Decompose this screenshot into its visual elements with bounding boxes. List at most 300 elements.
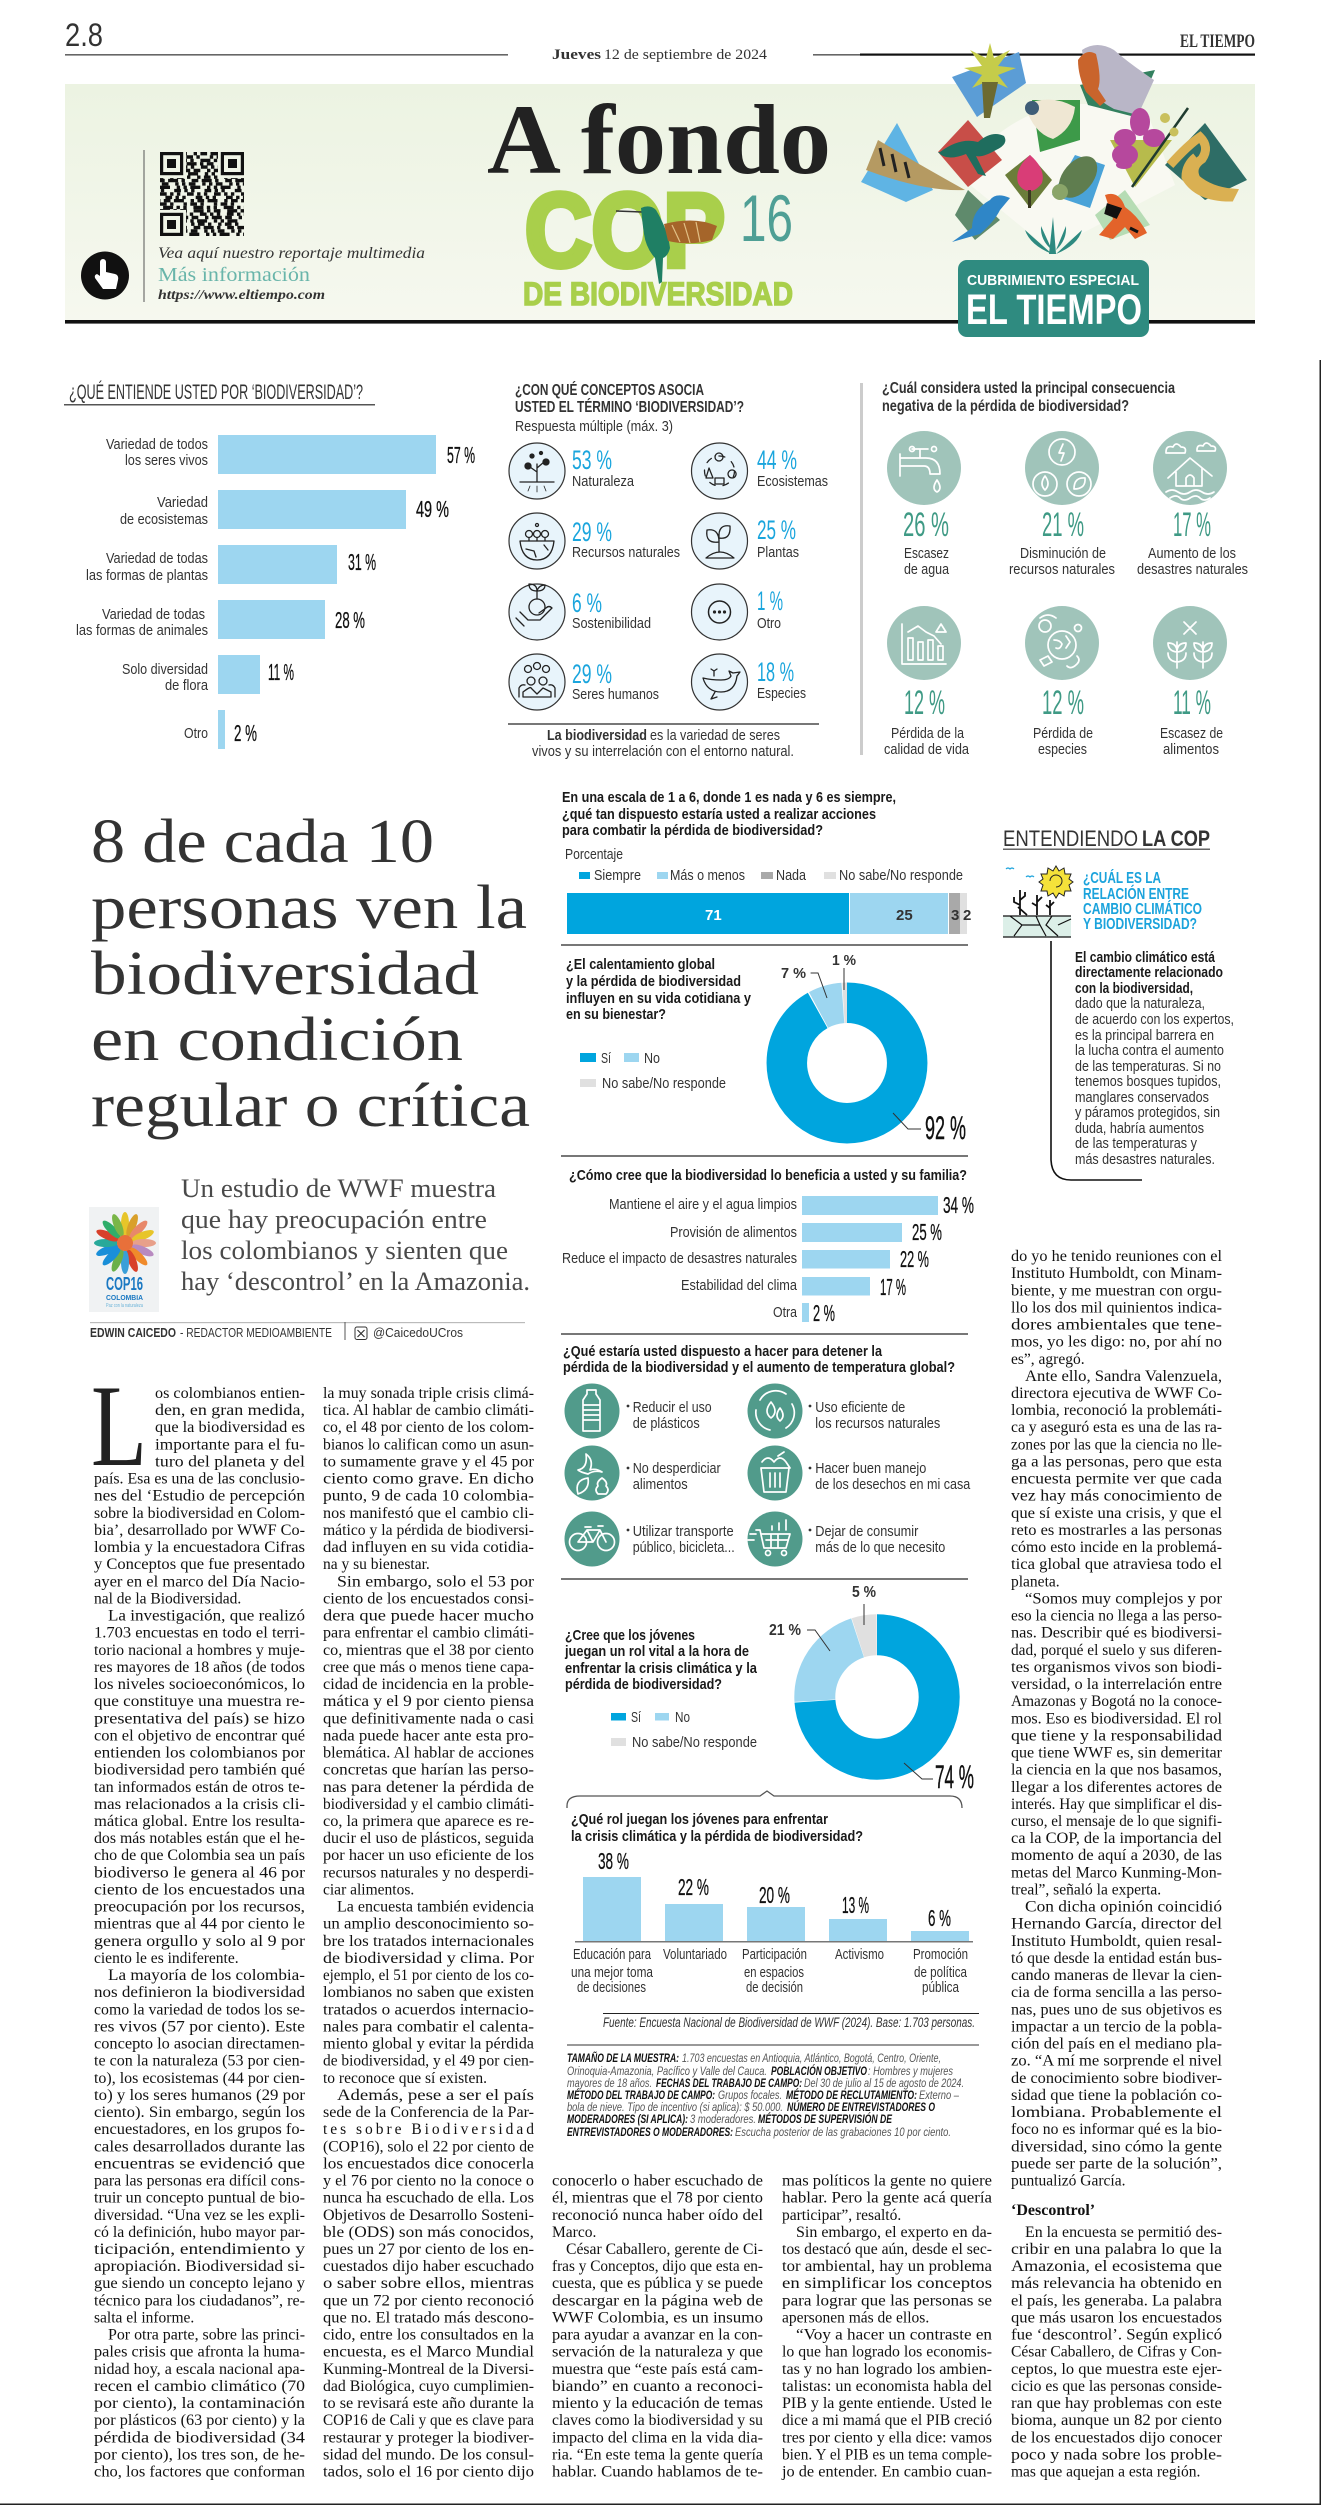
bar chart: Provisión de alimentos [670,1224,797,1241]
donut chart [765,952,966,1146]
column chart: una mejor toma [571,1964,654,1981]
text block: article column 1: nidad hoy, a escala nacional apa- [94,2361,305,2378]
text block: article column 2: encuesta, es el Marco Mundial [323,2344,534,2361]
percentages and labels [884,506,1248,758]
text block: article column 2: tratados o acuerdos internacio- [323,2001,534,2018]
text block: article column 2: tados, solo el 16 por ciento dijo [323,2464,534,2481]
text block: article column 1: den, en gran medida, [155,1402,305,1419]
text block: article column 2: para enfrentar el cambio climáti- [323,1625,534,1642]
text block: article column 2: tica. Al hablar de cambio climáti- [323,1402,534,1419]
text block: article column 1 [91,1362,306,2481]
text block: article column 1: cales desarrollados durante las [94,2138,305,2155]
legend [611,1709,757,1751]
byline: - REDACTOR MEDIOAMBIENTE [180,1325,332,1340]
text block: article column 2: los encuestados dice conocerla [323,2155,534,2172]
text block: article column 3: reconoció nunca haber oído del [552,2207,763,2224]
text block: article column 1: pérdida de biodiversidad (34 [94,2429,305,2446]
action labels [627,1399,971,1556]
methodology note: Grupos focales. [718,2088,782,2102]
icon: pointing hand [81,252,129,300]
deck: los colombianos y sienten que [181,1236,508,1265]
methodology note: TAMAÑO DE LA MUESTRA: [567,2050,679,2065]
text block: article column 2: bre los tratados internacionales [323,1933,534,1950]
text block: article column 2: Sin embargo, solo el 53 por [337,1573,535,1590]
heading [882,380,1175,415]
icon: wheat [1168,622,1212,668]
text block: article column 4: hablar. Pero la gente acá quería [782,2190,992,2207]
sidebar answer: tenemos bosques tupidos, [1075,1073,1221,1090]
text block: article column 1: con el objetivo de encontrar qué [94,1727,305,1744]
text block: article column 1: torio nacional a hombres y muje- [94,1642,305,1659]
percentages and labels: especies [1038,741,1087,758]
text block: article column 5: directora ejecutiva de WWF Co- [1011,1385,1222,1402]
sidebar question: CAMBIO CLIMÁTICO [1083,899,1202,918]
icon: otro [708,601,730,623]
bar chart: de ecosistemas [120,511,208,528]
text block: article column 2: ciar alimentos. [323,1882,414,1898]
sidebar answer: y páramos protegidos, sin [1075,1104,1220,1121]
text block: article column 1: ticipación, entendimiento y [94,2241,305,2258]
text block: article column 2: blemática. Al hablar de acciones [323,1744,534,1762]
text block: article column 2: ciento de los encuestados consi- [323,1590,534,1607]
bar chart: 2 % [813,1300,835,1326]
bar chart: 17 % [880,1274,906,1300]
question: En una escala de 1 a 6, donde 1 es nada y 6 es siempre, [562,789,896,806]
question [571,1811,863,1845]
text block: article column 5: fue ‘descontrol’. Según explicó [1011,2327,1222,2344]
question: para combatir la pérdida de biodiversidad? [562,822,823,839]
icon: food waste [577,1454,608,1494]
text block: article column 5: cia de forma sencilla a las perso- [1011,1984,1222,2001]
text block: article column 1: nes del ‘Estudio de percepción [94,1488,305,1505]
percentages: 29 % [572,659,612,689]
source line: Fuente: Encuesta Nacional de Biodiversidad de WWF (2024). Base: 1.703 personas. [603,2015,975,2030]
sidebar answer: de acuerdo con los expertos, [1075,1011,1234,1028]
multimedia text [158,245,425,303]
text block: article column 1: ciento le es indiferente. [94,1950,239,1967]
text block: article column 1: mientras que al 44 por ciento le [94,1916,305,1933]
text block: article column 1: para las personas era difícil cons- [94,2172,305,2190]
text block: article column 1: los niveles socioeconómicos, lo [94,1676,305,1693]
sidebar heading: LA COP [1142,826,1210,851]
bar chart: Estabilidad del clima [681,1277,798,1294]
text block: article column 1: genera orgullo y solo al 9 por [94,1933,306,1950]
question: influyen en su vida cotidiana y [566,990,752,1007]
text block: article column 2: mático y la pérdida de biodiversi- [323,1522,534,1539]
text block: article column 3: impacto del clima en la vida dia- [552,2429,763,2446]
text block: article column 5: César Caballero, de Cifras y Con- [1011,2344,1222,2361]
donut chart: 92 % [925,1110,966,1146]
stacked bar: 2 [963,907,971,924]
text block: article column 2: co, mientras que el 38 por ciento [323,1642,534,1659]
text block: article column 2: co, el 48 por ciento de los colom- [323,1419,534,1436]
text block: article column 3: él, mientras que el 78 por ciento [552,2190,763,2207]
text block: article column 5: mas que aquejan a esta región. [1011,2464,1200,2481]
text block: article column 2: Kunming-Montreal de la Diversi- [323,2361,534,2378]
text block: article column 5: impactar a un tercio de la pobla- [1011,2018,1222,2035]
text block: article column 2: sidad del mundo. De los consul- [323,2446,534,2463]
question: ¿Qué estaría usted dispuesto a hacer para detener la [563,1343,883,1360]
question: pérdida de biodiversidad? [565,1676,722,1693]
column chart: Educación para [573,1946,651,1963]
sidebar answer: de las temperaturas. Si no [1075,1058,1221,1075]
question: la crisis climática y la pérdida de biodiversidad? [571,1828,863,1845]
text block: article column 2: COP16 de Cali y que es clave para [323,2412,534,2429]
percentages: Especies [757,685,806,702]
text block: article column 1: dos más notables están que el he- [94,1830,305,1847]
sidebar: entendiendo la COP [1003,826,1234,1180]
percentages and labels: Escasez [904,545,949,562]
percentages: Otro [757,615,781,632]
text block: article column 3: ria. “En este tema la gente quería [552,2446,763,2463]
question [566,956,752,1023]
column chart: Participación [742,1946,807,1963]
text block: article column 5: vez hay más conocimiento de [1011,1488,1222,1505]
text block: article column 3: WWF Colombia, es un insumo [552,2310,763,2326]
bracket [567,1791,962,1808]
banner: A fondo COP16 [65,43,1255,337]
question [564,1627,758,1693]
text block: article column 1: nal de la Biodiversidad. [94,1590,241,1607]
column chart: Activismo [835,1946,884,1963]
text block: article column 5: que sí existe una crisis, y que el [1011,1505,1222,1522]
text block: article column 2: na y su bienestar. [323,1556,430,1573]
stacked bar: 71 [705,907,722,924]
text block: article column 1: tan informados están de otros te- [94,1779,305,1796]
methodology note: FECHAS DEL TRABAJO DE CAMPO: [656,2076,802,2090]
text block: article column 1: gue siendo un concepto lejano y [94,2275,305,2292]
action labels: los recursos naturales [815,1415,940,1432]
action labels: de plásticos [633,1415,700,1432]
masthead name: EL TIEMPO [1180,31,1255,52]
column chart: 20 % [759,1882,790,1908]
text block: article column 3: conocerlo o haber escuchado de [552,2172,763,2190]
text block: article column 5: encuesta permite ver que cada [1011,1471,1222,1488]
percentages and labels: Escasez de [1160,725,1223,742]
text block: article column 5: la ciencia en la que nos basamos, [1011,1762,1222,1779]
text block: article column 5: que más usaron los encuestados [1011,2310,1222,2326]
column chart [571,1848,973,1996]
panel: acciones dispuestas [561,1343,971,1580]
text block: article column 2: ble (ODS) son más conocidos, [323,2224,534,2241]
methodology note: 1.703 encuestas en Antioquia, Atlántico, Bogotá, Centro, Oriente, [682,2051,941,2065]
column chart: Voluntariado [663,1946,727,1963]
concept circles [509,443,748,710]
legend: Más o menos [670,867,745,884]
text block: article column 5: En la encuesta se permitió des- [1025,2224,1222,2241]
definition note: La biodiversidad [547,727,647,744]
icon: sostenibilidad [516,584,552,626]
text block: article column 1: ciento de los encuestados una [94,1882,305,1898]
text block: article column 4: tas y no han logrado los ambien- [782,2361,992,2378]
methodology note: 3 moderadores. [690,2112,756,2126]
caiman [861,123,965,202]
text block: article column 3: biando” en cuanto a reconoci- [552,2378,763,2395]
text block: article column 3: Marco. [552,2224,596,2241]
byline: EDWIN CAICEDO [90,1325,176,1340]
snake [1165,123,1247,200]
bar chart: las formas de animales [76,622,208,639]
text block: article column 5: llegar a los diferentes actores de [1011,1779,1222,1796]
text block: article column 2: de biodiversidad y clima. Por [323,1950,535,1967]
action labels: de los desechos en mi casa [815,1476,971,1493]
icon: shopping cart [748,1520,790,1556]
methodology note: POBLACIÓN OBJETIVO [771,2063,867,2078]
text block: article column 5: Amazonas y Bogotá no la conoce- [1011,1693,1222,1710]
donut chart [769,1584,974,1795]
icon: X [355,1327,367,1340]
icon: bottle [583,1390,600,1431]
text block: article column 5: zones por las que la ciencia no lle- [1011,1436,1222,1453]
text block: article column 2: concretas que harían las perso- [323,1762,534,1779]
bar chart: 31 % [348,549,376,575]
column chart: de decisión [746,1979,803,1996]
text block: article column 1: que constituye una muestra re- [94,1693,305,1710]
percentages: 18 % [757,657,794,687]
text block: article column 5: interés. Hay que simplificar el dis- [1011,1796,1222,1813]
headline: biodiversidad [91,940,479,1008]
column chart: 38 % [598,1848,629,1874]
sidebar question: RELACIÓN ENTRE [1083,884,1189,903]
text block: article column 3: fras y Conceptos, dijo que esta en- [552,2258,763,2275]
bar chart: 11 % [268,659,294,685]
text block: article column 2: nas para detener la pérdida de [323,1779,534,1796]
methodology note: MÉTODO DEL TRABAJO DE CAMPO: [567,2087,715,2102]
text block: article column 5: Hernando García, director del [1011,1916,1222,1933]
text block: article column 2: dad influyen en su vida cotidia- [323,1539,534,1556]
percentages: 29 % [572,517,612,547]
text block: article column 2: recursos naturales y no desperdi- [323,1864,534,1881]
text block: article column 5: el país, les generaba. La palabra [1011,2292,1222,2309]
headline: personas ven la [91,874,527,942]
text block: article column 1: importante para el fu- [155,1436,305,1453]
text block: article column 2: que definitivamente nada o casi [323,1710,535,1727]
bar chart: Mantiene el aire y el agua limpios [609,1196,797,1213]
donut chart: 5 % [852,1584,876,1601]
text block: article column 5: mos, yo les digo: no, por ahí no [1011,1334,1222,1351]
text block: article column 1: cho, los factores que conforman [94,2464,305,2481]
text block: article column 5: que tiene y la responsabilidad [1011,1727,1222,1744]
methodology note [567,2044,979,2139]
text block: article column 1: encuentras se evidenció que [94,2155,305,2172]
bar chart: 57 % [447,442,475,468]
text block: article column 1: diversidad. “Una vez se les expli- [94,2207,305,2224]
badge: cubrimiento especial: EL TIEMPO [966,286,1142,334]
percentages [572,445,828,703]
orchids [1110,108,1188,187]
legend [579,867,963,884]
question: ¿Cómo cree que la biodiversidad lo beneficia a usted y su familia? [569,1167,967,1184]
text block: article column 5: mos. Eso es biodiversidad. El rol [1011,1710,1222,1727]
text block: article column 1: y Conceptos que fue presentado [94,1556,305,1573]
icon: species globe [1039,615,1082,668]
bar chart: los seres vivos [125,452,208,469]
text block: article column 4: “Voy a hacer un contraste en [796,2327,992,2344]
percentages: 6 % [572,588,602,618]
text block: article column 2: ejemplo, el 51 por ciento de los co- [323,1967,534,1984]
text block: article column 1: bia’, desarrollado por WWF Co- [94,1522,305,1539]
sidebar question: ¿CUÁL ES LA [1083,868,1161,887]
text block: article column 3: cuesta, que es pública y se puede [552,2275,763,2292]
bar chart [562,1192,974,1326]
question: juegan un rol vital a la hora de [564,1643,749,1660]
text block: article column 2: cuestados dijo haber escuchado [323,2258,534,2275]
sidebar answer: de las temperaturas y [1075,1135,1197,1152]
bar chart: Reduce el impacto de desastres naturales [562,1250,797,1267]
action labels: No desperdiciar [633,1460,721,1477]
text block: article column 4: PIB y la gente entiende. Usted le [782,2395,992,2412]
byline: @CaicedoUCros [373,1325,463,1340]
text block: article column 5: lombiana. Probablemente el [1011,2104,1222,2121]
consequence circles [887,431,1227,680]
percentages and labels: Aumento de los [1148,545,1236,562]
logo: COP16 Colombia: Paz con la naturaleza [106,1303,143,1309]
text block: article column 2: un amplio desconocimiento so- [323,1916,534,1933]
definition note: vivos y su interrelación con el entorno natural. [532,743,794,760]
text block: article column 1: cho de que Colombia sea un país [94,1847,305,1864]
text block: article column 5: cómo esto incide en la problemá- [1011,1539,1222,1556]
text block: article column 5: tó que desde la entidad están bus- [1011,1950,1222,1967]
text block: article column 4: en simplificar los conceptos [782,2275,992,2292]
action labels: más de lo que necesito [815,1539,945,1556]
donut chart: 74 % [935,1759,974,1795]
sidebar answer: manglares conservados [1075,1089,1209,1106]
percentages and labels: Disminución de [1020,545,1106,562]
icon: hummingbird [616,206,717,284]
deck: hay ‘descontrol’ en la Amazonia. [181,1267,530,1296]
percentages: Recursos naturales [572,544,680,561]
frog [938,120,1005,187]
sidebar answer: duda, habría aumentos [1075,1120,1204,1137]
stacked bar: 25 [896,907,913,924]
heading: ¿CON QUÉ CONCEPTOS ASOCIA [515,380,704,399]
text block: article column 4: tos destacó que aún, desde el sec- [782,2241,992,2258]
text block: article column 5: Instituto Humboldt, con Minam- [1011,1265,1222,1282]
methodology note: Externo – [919,2088,959,2102]
bar chart: 22 % [900,1246,929,1272]
percentages and labels: Pérdida de la [891,725,965,742]
QR code [160,152,244,236]
icon: ecosistemas [704,453,736,486]
percentages: 53 % [572,445,612,475]
action labels: Hacer buen manejo [815,1460,926,1477]
text block: article column 3: para ayudar a avanzar en la con- [552,2327,763,2344]
text block: article column 2: Objetivos de Desarrollo Sosteni- [323,2207,534,2224]
text block: article column 2: restaurar y proteger la biodiver- [323,2429,534,2446]
text block: article column 2: cidad de incidencia en la proble- [323,1676,534,1693]
text block: article column 2: tes sobre Biodiversidad [323,2121,534,2138]
text block: article column 1: nos definieron la biodiversidad [94,1984,305,2001]
percentages: 25 % [757,515,796,545]
text block: article column 4: mas políticos la gente no quiere [782,2172,992,2190]
methodology note: bola de nieve. Tipo de incentivo (si aplica): $ 50.000. [567,2100,783,2114]
methodology note: MÉTODO DE RECLUTAMIENTO: [786,2087,917,2102]
text block: article column 1: mas relacionados a la crisis cli- [94,1796,305,1813]
legend: Nada [776,867,807,884]
text block: article column 2: co, la primera que aparece es re- [323,1813,534,1830]
text block: article column 1: lombia y la encuestadora Cifras [94,1539,305,1556]
stacked bar: 3 [951,907,959,924]
text block: article column 5: llo los dos mil quinientos indica- [1011,1300,1222,1316]
methodology note: MÉTODOS DE SUPERVISIÓN DE [758,2111,893,2126]
text block: article column 5: lombia, reconoció la problemáti- [1011,1402,1222,1419]
panel: qué entiende por biodiversidad [64,381,475,749]
text block: article column 1: apropiación. Biodiversidad si- [94,2258,305,2275]
text block: article column 1: ayer en el marco del Día Nacio- [94,1573,305,1590]
text block: article column 2: to sumamente grave y el 45 por [323,1454,535,1470]
text block: article column 1: Por otra parte, sobre las princi- [108,2327,305,2344]
action circles [564,1384,802,1566]
badge: cubrimiento especial: CUBRIMIENTO ESPECIAL [967,272,1139,289]
percentages and labels: de agua [904,561,950,578]
icon: falling chart [902,624,946,664]
text block: article column 5: Con dicha opinión coincidió [1025,1899,1222,1916]
pink flower [1005,155,1052,208]
text block: article column 4: dice a mi mamá que el PIB creció [782,2412,992,2429]
bar chart: Variedad de todos [106,436,208,453]
text block: article column 5: diversidad, sino cómo la gente [1011,2138,1222,2155]
percentages: 44 % [757,445,797,475]
heading: ¿Cuál considera usted la principal consecuencia [882,380,1175,397]
text block: article column 1: res vivos (57 por ciento). Este [94,2018,305,2035]
methodology note: : Hombres y mujeres [868,2064,953,2078]
text block: article column 3: descargar en la página web de [552,2292,763,2309]
text block: article column 2: Además, pese a ser el país [337,2087,534,2104]
legend: Siempre [594,867,641,884]
column chart: pública [922,1979,960,1996]
percentages and labels: 26 % [903,506,949,544]
text block: article column 1: entienden los colombianos por [94,1744,306,1762]
icon: flooded house [1166,443,1216,500]
panel: beneficios bar chart [561,1167,974,1335]
text block: article column 2: dera que puede hacer mucho [323,1608,534,1625]
percentages: Naturaleza [572,473,635,490]
text block: article column 5: ga a las personas, pero que esta [1011,1454,1222,1470]
logo: COP16 de biodiversidad: 16 [740,181,793,255]
text block: article column 3: miento y la educación de temas [552,2395,763,2412]
question: ¿Cree que los jóvenes [565,1627,695,1644]
sidebar answer: dado que la naturaleza, [1075,995,1205,1012]
text block: article column 1: preocupación por los recursos, [94,1899,305,1916]
methodology note: mayores de 18 años. [567,2076,652,2090]
heading: ¿QUÉ ENTIENDE USTED POR ‘BIODIVERSIDAD’? [69,381,363,404]
legend [580,1050,726,1092]
sidebar answer: más desastres naturales. [1075,1151,1215,1168]
icon: recycling drops [756,1391,794,1430]
text block: article column 5: puntualizó García. [1011,2172,1125,2190]
bar chart: Solo diversidad [122,661,208,678]
text block: article column 2: que un 72 por ciento reconoció [323,2292,534,2309]
percentages and labels: 17 % [1173,506,1211,544]
text block: article column 5: es”, agregó. [1011,1351,1085,1368]
text block: article column 5: do yo he tenido reuniones con el [1011,1248,1222,1265]
text block: article column 4: para lograr que las personas se [782,2292,992,2309]
text block: article column 2: punto, 9 de cada 10 colombia- [323,1488,534,1505]
question: ¿Qué rol juegan los jóvenes para enfrentar [571,1811,828,1828]
column chart: de decisiones [577,1979,646,1996]
text block: article column 5: cicio es que las personas conside- [1011,2378,1222,2395]
percentages and labels: 12 % [904,684,945,722]
bar chart: 28 % [335,607,365,633]
text block: article column 3 [552,2172,763,2481]
bar chart: 2 % [234,720,257,746]
text block: article column 3: hablar. Cuando hablamos de te- [552,2464,763,2481]
panel: consecuencias negativas [882,380,1248,758]
methodology note: MODERADORES (SI APLICA): [567,2112,688,2126]
headline: en condición [91,1006,463,1074]
text block: article column 1: pales crisis que afronta la huma- [94,2344,305,2361]
text block: article column 3: muestra que “este país está cam- [552,2361,763,2378]
